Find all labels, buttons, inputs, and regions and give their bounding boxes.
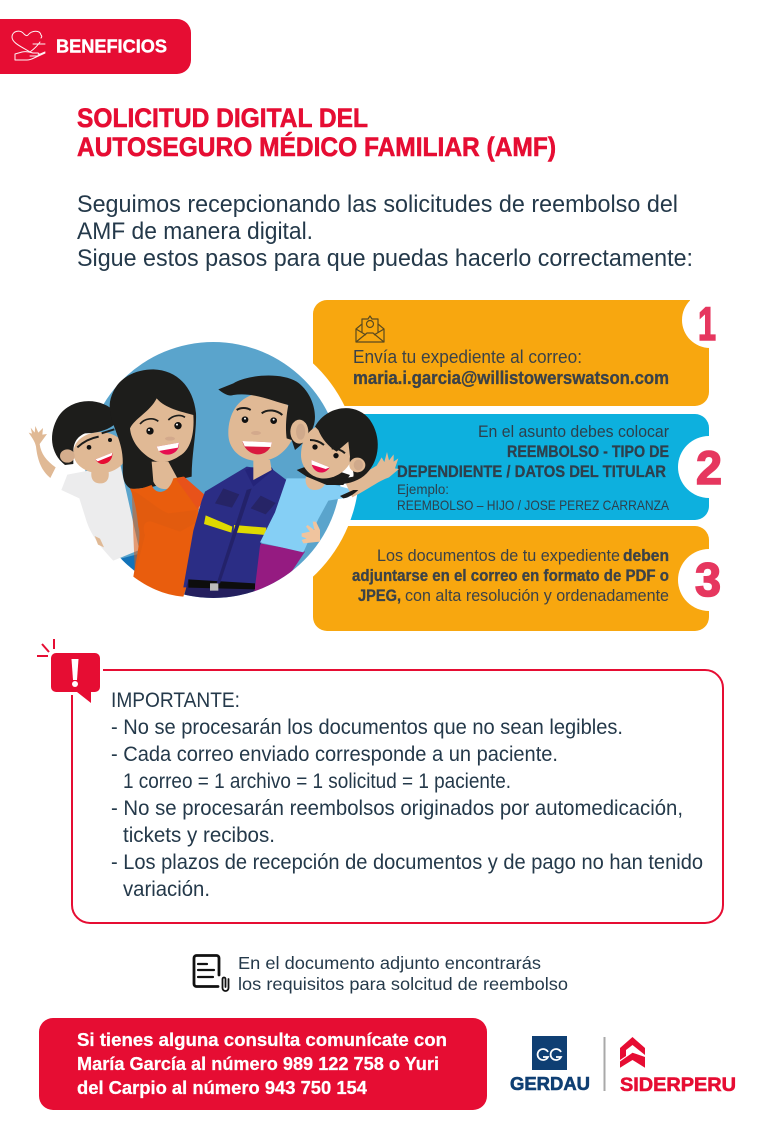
- divider: [604, 1037, 606, 1091]
- importante text: variación.: [123, 878, 210, 901]
- number 3: 3: [695, 553, 721, 606]
- panel: step 3: [313, 526, 740, 631]
- icon: email envelope: [356, 316, 384, 342]
- number 2: 2: [696, 441, 722, 494]
- step 3 text: [352, 547, 669, 605]
- intro text: [77, 191, 693, 272]
- contact text: [77, 1029, 447, 1098]
- importante text: IMPORTANTE:: [111, 689, 240, 712]
- intro text: AMF de manera digital.: [77, 218, 313, 245]
- attachment note: [238, 953, 568, 994]
- step 3 text: JPEG,: [358, 587, 401, 605]
- panel: step 1: [313, 292, 738, 406]
- mother hand: [198, 497, 214, 513]
- number 1: 1: [698, 297, 716, 350]
- badge: beneficios: [0, 19, 191, 74]
- contact text: María García al número 989 122 758 o Yuri: [77, 1053, 439, 1074]
- father uniform: [183, 467, 292, 600]
- step 1 text: Envía tu expediente al correo:: [353, 347, 582, 367]
- step 2 text: Ejemplo:: [397, 482, 449, 497]
- step 3 text: adjuntarse en el correo en formato de PDF o: [352, 567, 669, 585]
- mother shirt: [130, 477, 207, 597]
- step 2 text: REEMBOLSO - TIPO DE: [507, 442, 669, 461]
- importante text: - Los plazos de recepción de documentos y de pago no han tenido: [111, 851, 703, 874]
- step 2 text: REEMBOLSO – HIJO / JOSE PEREZ CARRANZA: [397, 497, 670, 513]
- attachment note: los requisitos para solcitud de reembolso: [238, 974, 568, 994]
- importante text: 1 correo = 1 archivo = 1 solicitud = 1 paciente.: [123, 770, 511, 793]
- step 1 text: maria.i.garcia@willistowerswatson.com: [353, 368, 669, 388]
- logo: siderperu: SIDERPERU: [620, 1075, 736, 1096]
- logo: gerdau: [510, 1036, 590, 1094]
- left boy head: [73, 432, 127, 473]
- importante text: - No se procesarán reembolsos originados por automedicación,: [111, 797, 683, 820]
- right girl head: [301, 425, 353, 478]
- title: AUTOSEGURO MÉDICO FAMILIAR (AMF): [77, 131, 556, 162]
- step 1 text: [353, 347, 669, 388]
- icon: heart in hand: [12, 31, 45, 60]
- panel: step 2: [300, 414, 740, 520]
- contact text: del Carpio al número 943 750 154: [77, 1077, 368, 1098]
- right girl hand lower: [302, 522, 320, 543]
- importante text: tickets y recibos.: [123, 824, 275, 847]
- contact text: Si tienes alguna consulta comunícate con: [77, 1029, 447, 1050]
- title: [77, 103, 556, 162]
- importante text: - Cada correo enviado corresponde a un paciente.: [111, 743, 558, 766]
- illustration: family: [28, 342, 399, 598]
- mother face: [130, 398, 194, 462]
- logo: siderperu: [620, 1037, 736, 1096]
- icon: alert bubble: [37, 639, 100, 703]
- step 2 text: DEPENDIENTE / DATOS DEL TITULAR: [397, 462, 666, 481]
- left boy arm: [29, 426, 56, 478]
- importante text: - No se procesarán los documentos que no sean legibles.: [111, 716, 623, 739]
- importante text: [111, 689, 703, 901]
- step 3 text: deben: [623, 547, 669, 565]
- contact box: [39, 1018, 487, 1110]
- label: beneficios: BENEFICIOS: [56, 36, 167, 56]
- step 2 text: En el asunto debes colocar: [478, 422, 669, 441]
- left boy shirt: [61, 463, 139, 561]
- step 2 text: [397, 422, 670, 513]
- intro text: Seguimos recepcionando las solicitudes de reembolso del: [77, 191, 678, 218]
- panel: importante: [37, 639, 723, 923]
- mother hair back: [110, 369, 196, 489]
- title: SOLICITUD DIGITAL DEL: [77, 103, 368, 133]
- step 3 text: Los documentos de tu expediente: [377, 547, 620, 565]
- intro text: Sigue estos pasos para que puedas hacerlo correctamente:: [77, 245, 693, 272]
- father face: [228, 393, 293, 461]
- right girl neck: [306, 477, 325, 490]
- logo: gerdau: GERDAU: [510, 1073, 590, 1094]
- icon: document with clip: [194, 956, 228, 991]
- right girl arm: [346, 452, 399, 497]
- step 3 text: con alta resolución y ordenadamente: [405, 587, 669, 605]
- attachment note: En el documento adjunto encontrarás: [238, 953, 541, 973]
- right girl shirt: [260, 478, 350, 552]
